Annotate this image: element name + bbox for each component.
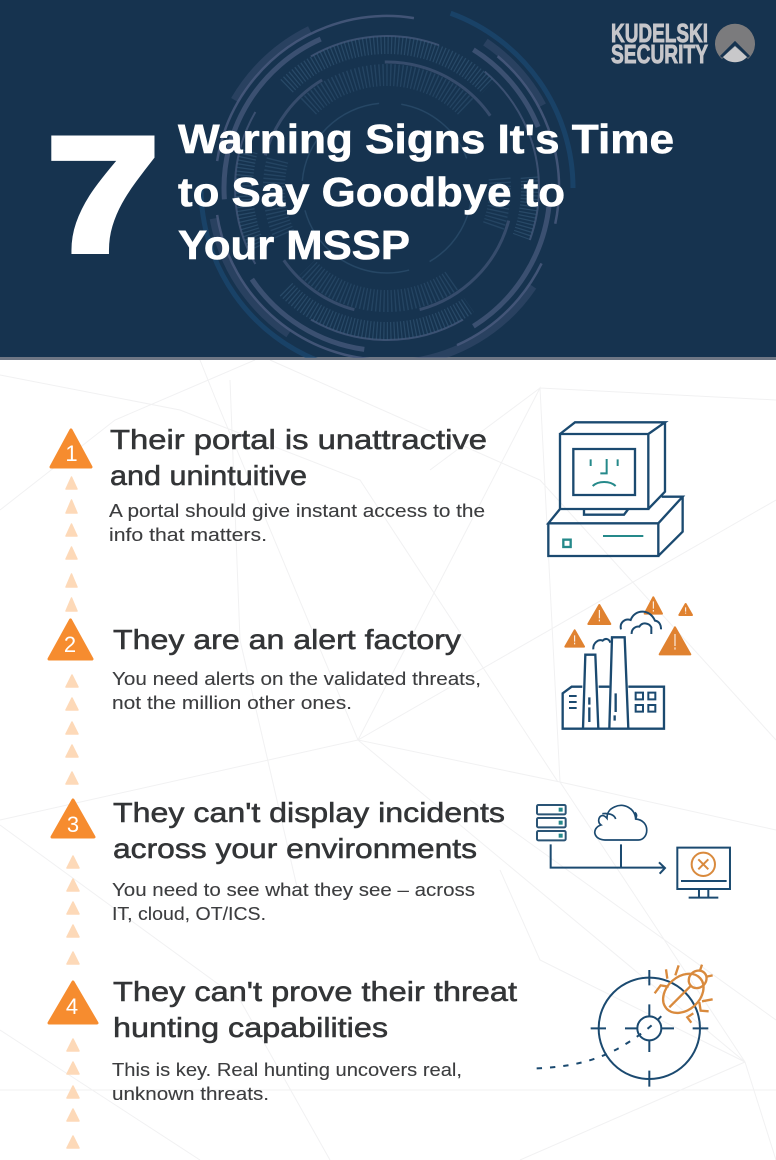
warning marker 1 with trail <box>51 430 91 611</box>
warning marker 3 with trail <box>52 800 94 964</box>
heading 1: Their portal is unattractive <box>110 424 487 455</box>
warning marker 2 with trail: 2 <box>64 632 76 657</box>
title: Your MSSP <box>178 222 410 268</box>
description 1: info that matters. <box>109 525 267 545</box>
radial technology rings <box>200 11 576 358</box>
heading 2: They are an alert factory <box>113 624 461 655</box>
heading 3 <box>113 797 505 864</box>
description 4: This is key. Real hunting uncovers real, <box>112 1060 462 1080</box>
logo: SECURITY <box>611 39 708 69</box>
item 1 <box>51 422 683 611</box>
description 3: IT, cloud, OT/ICS. <box>112 904 266 924</box>
warning marker 1 with trail: 1 <box>65 441 78 466</box>
description 4 <box>112 1060 462 1104</box>
item 2 <box>49 597 692 784</box>
item 4 <box>49 965 713 1148</box>
title: to Say Goodbye to <box>178 169 565 215</box>
description 2: not the million other ones. <box>112 693 352 713</box>
description 2: You need alerts on the validated threats, <box>112 669 481 689</box>
icon: threat target and bug <box>537 965 713 1087</box>
description 3: You need to see what they see – across <box>112 880 475 900</box>
warning marker 3 with trail: 3 <box>67 812 79 837</box>
heading 3: They can't display incidents <box>113 797 505 828</box>
title: Warning Signs It's Time <box>178 116 674 162</box>
icon: environments diagram <box>537 805 730 898</box>
heading 1 <box>110 424 487 491</box>
heading 3: across your environments <box>113 833 477 864</box>
background mesh of faint lines <box>0 360 776 1160</box>
logo: KUDELSKI <box>611 18 708 48</box>
warning marker 2 with trail <box>49 620 92 784</box>
description 1 <box>109 501 485 545</box>
icon: alert factory <box>563 597 692 729</box>
warning marker 4 with trail <box>49 982 97 1148</box>
title <box>178 116 674 268</box>
header banner <box>0 0 776 360</box>
big numeral 7: 7 <box>47 104 159 286</box>
heading 4: They can't prove their threat <box>113 976 517 1007</box>
logo <box>611 18 755 69</box>
description 1: A portal should give instant access to the <box>109 501 485 521</box>
warning marker 4 with trail: 4 <box>66 994 78 1019</box>
description 3 <box>112 880 475 924</box>
description 2 <box>112 669 481 713</box>
item 3 <box>52 797 730 964</box>
heading 4 <box>113 976 517 1043</box>
heading 1: and unintuitive <box>110 460 307 491</box>
description 4: unknown threats. <box>112 1084 269 1104</box>
icon: sad computer <box>548 422 683 556</box>
heading 4: hunting capabilities <box>113 1012 388 1043</box>
